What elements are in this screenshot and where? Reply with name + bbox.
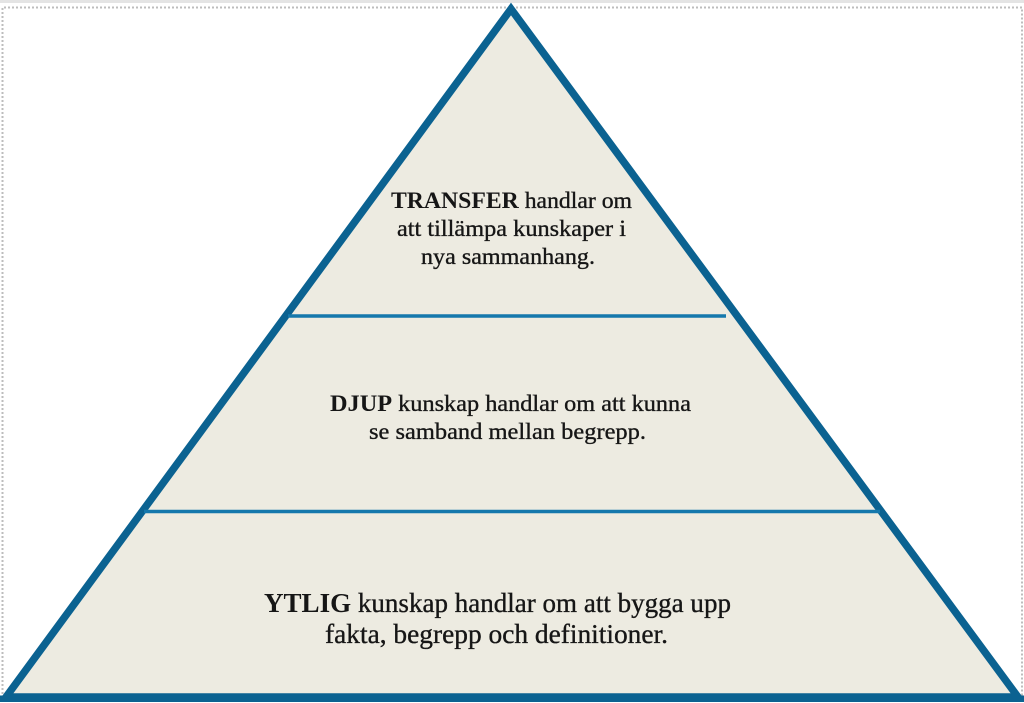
text: deep tier (330, 391, 692, 445)
text: deep tier: se samband mellan begrepp. (369, 419, 646, 445)
text: surface tier (264, 588, 731, 649)
text: transfer tier: nya sammanhang. (421, 244, 595, 270)
divider: deep / surface (144, 510, 880, 513)
text: transfer tier (391, 188, 632, 270)
text: transfer tier: TRANSFER handlar om (391, 188, 632, 214)
text: transfer tier: att tillämpa kunskaper i (397, 216, 626, 242)
pyramid base band (0, 696, 1024, 702)
divider: transfer / deep (288, 314, 726, 318)
text: deep tier: DJUP kunskap handlar om att kunna (330, 391, 692, 417)
text: surface tier: YTLIG kunskap handlar om att bygga upp (264, 588, 731, 618)
text: surface tier: fakta, begrepp och definitioner. (325, 619, 668, 649)
